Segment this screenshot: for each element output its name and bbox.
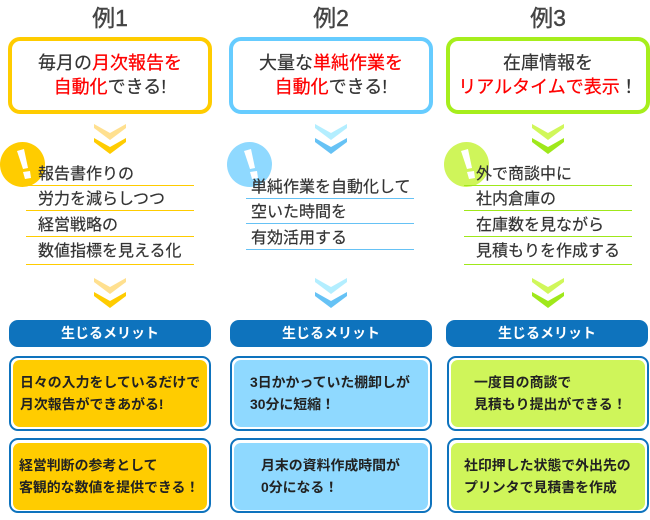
arrow: example 1 lower chevrons <box>94 278 126 308</box>
panel: example 1 summary <box>8 37 212 114</box>
panel: example 1 benefit 2 <box>9 438 211 513</box>
panel: example 2 summary: 自動化できる! <box>275 77 387 97</box>
icon: example 2 exclamation badge <box>227 142 272 187</box>
panel: example 2 benefit 1 <box>230 356 432 431</box>
heading: example 2 benefits <box>230 320 432 347</box>
panel: example 1 benefit 2: 経営判断の参考として <box>19 457 158 473</box>
panel: example 3 benefit 1 <box>447 356 649 431</box>
panel: example 3 benefit 1: 見積もり提出ができる！ <box>474 396 627 412</box>
text block: example 1 details <box>26 165 194 265</box>
panel: example 1 benefit 1: 日々の入力をしているだけで <box>20 374 200 390</box>
arrow: example 1 upper chevrons <box>94 124 126 154</box>
panel: example 3 benefit 2: プリンタで見積書を作成 <box>464 479 617 495</box>
text block: example 2 details <box>246 178 414 250</box>
text block: example 3 details: 見積もりを作成する <box>476 243 620 260</box>
text block: example 1 details: 報告書作りの <box>38 166 134 183</box>
panel: example 1 benefit 2: 客観的な数値を提供できる！ <box>19 479 199 495</box>
panel: example 1 summary: 自動化できる! <box>54 77 166 97</box>
panel: example 2 benefit 2 <box>230 438 432 513</box>
panel: example 3 summary <box>446 37 650 114</box>
icon: example 3 exclamation badge <box>444 142 489 187</box>
text block: example 3 details: 在庫数を見ながら <box>476 217 604 234</box>
text block: example 2 details: 単純作業を自動化して <box>251 179 411 196</box>
heading: example 3 benefits: 生じるメリット <box>498 325 596 341</box>
panel: example 2 benefit 2: 月末の資料作成時間が <box>261 457 400 473</box>
panel: example 3 summary: 在庫情報を <box>503 53 593 73</box>
heading: example 2 benefits: 生じるメリット <box>282 325 380 341</box>
arrow: example 2 upper chevrons <box>315 124 347 154</box>
text block: example 3 details <box>464 165 632 265</box>
text block: example 2 details: 有効活用する <box>251 230 347 247</box>
panel: example 2 benefit 1: 30分に短縮！ <box>250 396 335 412</box>
panel: example 3 benefit 2 <box>447 438 649 513</box>
heading: example 2: 例2 <box>313 5 349 31</box>
arrow: example 2 lower chevrons <box>315 278 347 308</box>
panel: example 3 benefit 1: 一度目の商談で <box>474 374 571 390</box>
text block: example 1 details: 労力を減らしつつ <box>38 191 165 208</box>
panel: example 1 benefit 1: 月次報告ができあがる! <box>20 396 164 412</box>
text block: example 1 details: 数値指標を見える化 <box>38 243 182 260</box>
panel: example 1 benefit 1 <box>9 356 211 431</box>
heading: example 1 benefits: 生じるメリット <box>61 325 159 341</box>
heading: example 3 benefits <box>446 320 648 347</box>
panel: example 2 benefit 2: 0分になる！ <box>261 479 338 495</box>
heading: example 1 benefits <box>9 320 211 347</box>
text block: example 3 details: 外で商談中に <box>476 166 572 183</box>
icon: example 1 exclamation badge <box>0 142 45 187</box>
panel: example 3 summary: リアルタイムで表示！ <box>458 77 638 97</box>
text block: example 1 details: 経営戦略の <box>38 217 118 234</box>
panel: example 2 summary <box>229 37 433 114</box>
heading: example 3: 例3 <box>530 5 566 31</box>
panel: example 3 benefit 2: 社印押した状態で外出先の <box>464 457 631 473</box>
heading: example 1: 例1 <box>92 5 128 31</box>
arrow: example 3 upper chevrons <box>532 124 564 154</box>
text block: example 3 details: 社内倉庫の <box>476 191 556 208</box>
arrow: example 3 lower chevrons <box>532 278 564 308</box>
panel: example 2 summary: 大量な単純作業を <box>259 53 403 73</box>
text block: example 2 details: 空いた時間を <box>251 204 347 221</box>
panel: example 2 benefit 1: 3日かかっていた棚卸しが <box>250 374 410 390</box>
panel: example 1 summary: 毎月の月次報告を <box>38 53 182 73</box>
